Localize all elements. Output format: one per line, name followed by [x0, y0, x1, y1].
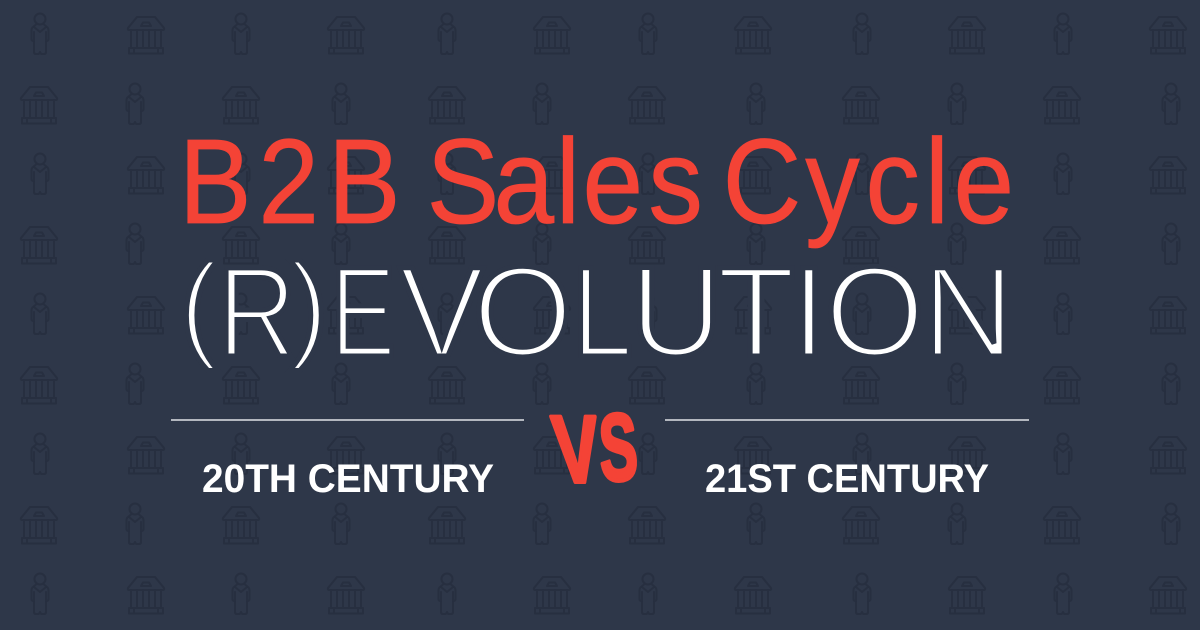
title: (R)EVOLUTION: )	[289, 239, 329, 372]
label: 20th century: 20TH CENTURY	[202, 457, 494, 501]
title: (R)EVOLUTION: E	[330, 241, 395, 384]
title: (R)EVOLUTION: (	[179, 239, 219, 372]
VS badge: V	[548, 396, 605, 503]
title: (R)EVOLUTION: L	[572, 241, 633, 384]
title: (R)EVOLUTION: VO	[399, 241, 573, 384]
title: (R)EVOLUTION: UTION	[630, 241, 1014, 384]
VS badge: S	[596, 393, 640, 502]
title: (R)EVOLUTION	[179, 239, 1014, 384]
right divider line	[665, 419, 1029, 421]
title: (R)EVOLUTION: R	[218, 241, 296, 384]
label: 21st century: 21ST CENTURY	[705, 457, 989, 501]
VS badge	[548, 393, 640, 503]
left divider line	[171, 419, 524, 421]
title: B2B Sales Cycle: B2B Sales Cycle	[179, 115, 1014, 249]
